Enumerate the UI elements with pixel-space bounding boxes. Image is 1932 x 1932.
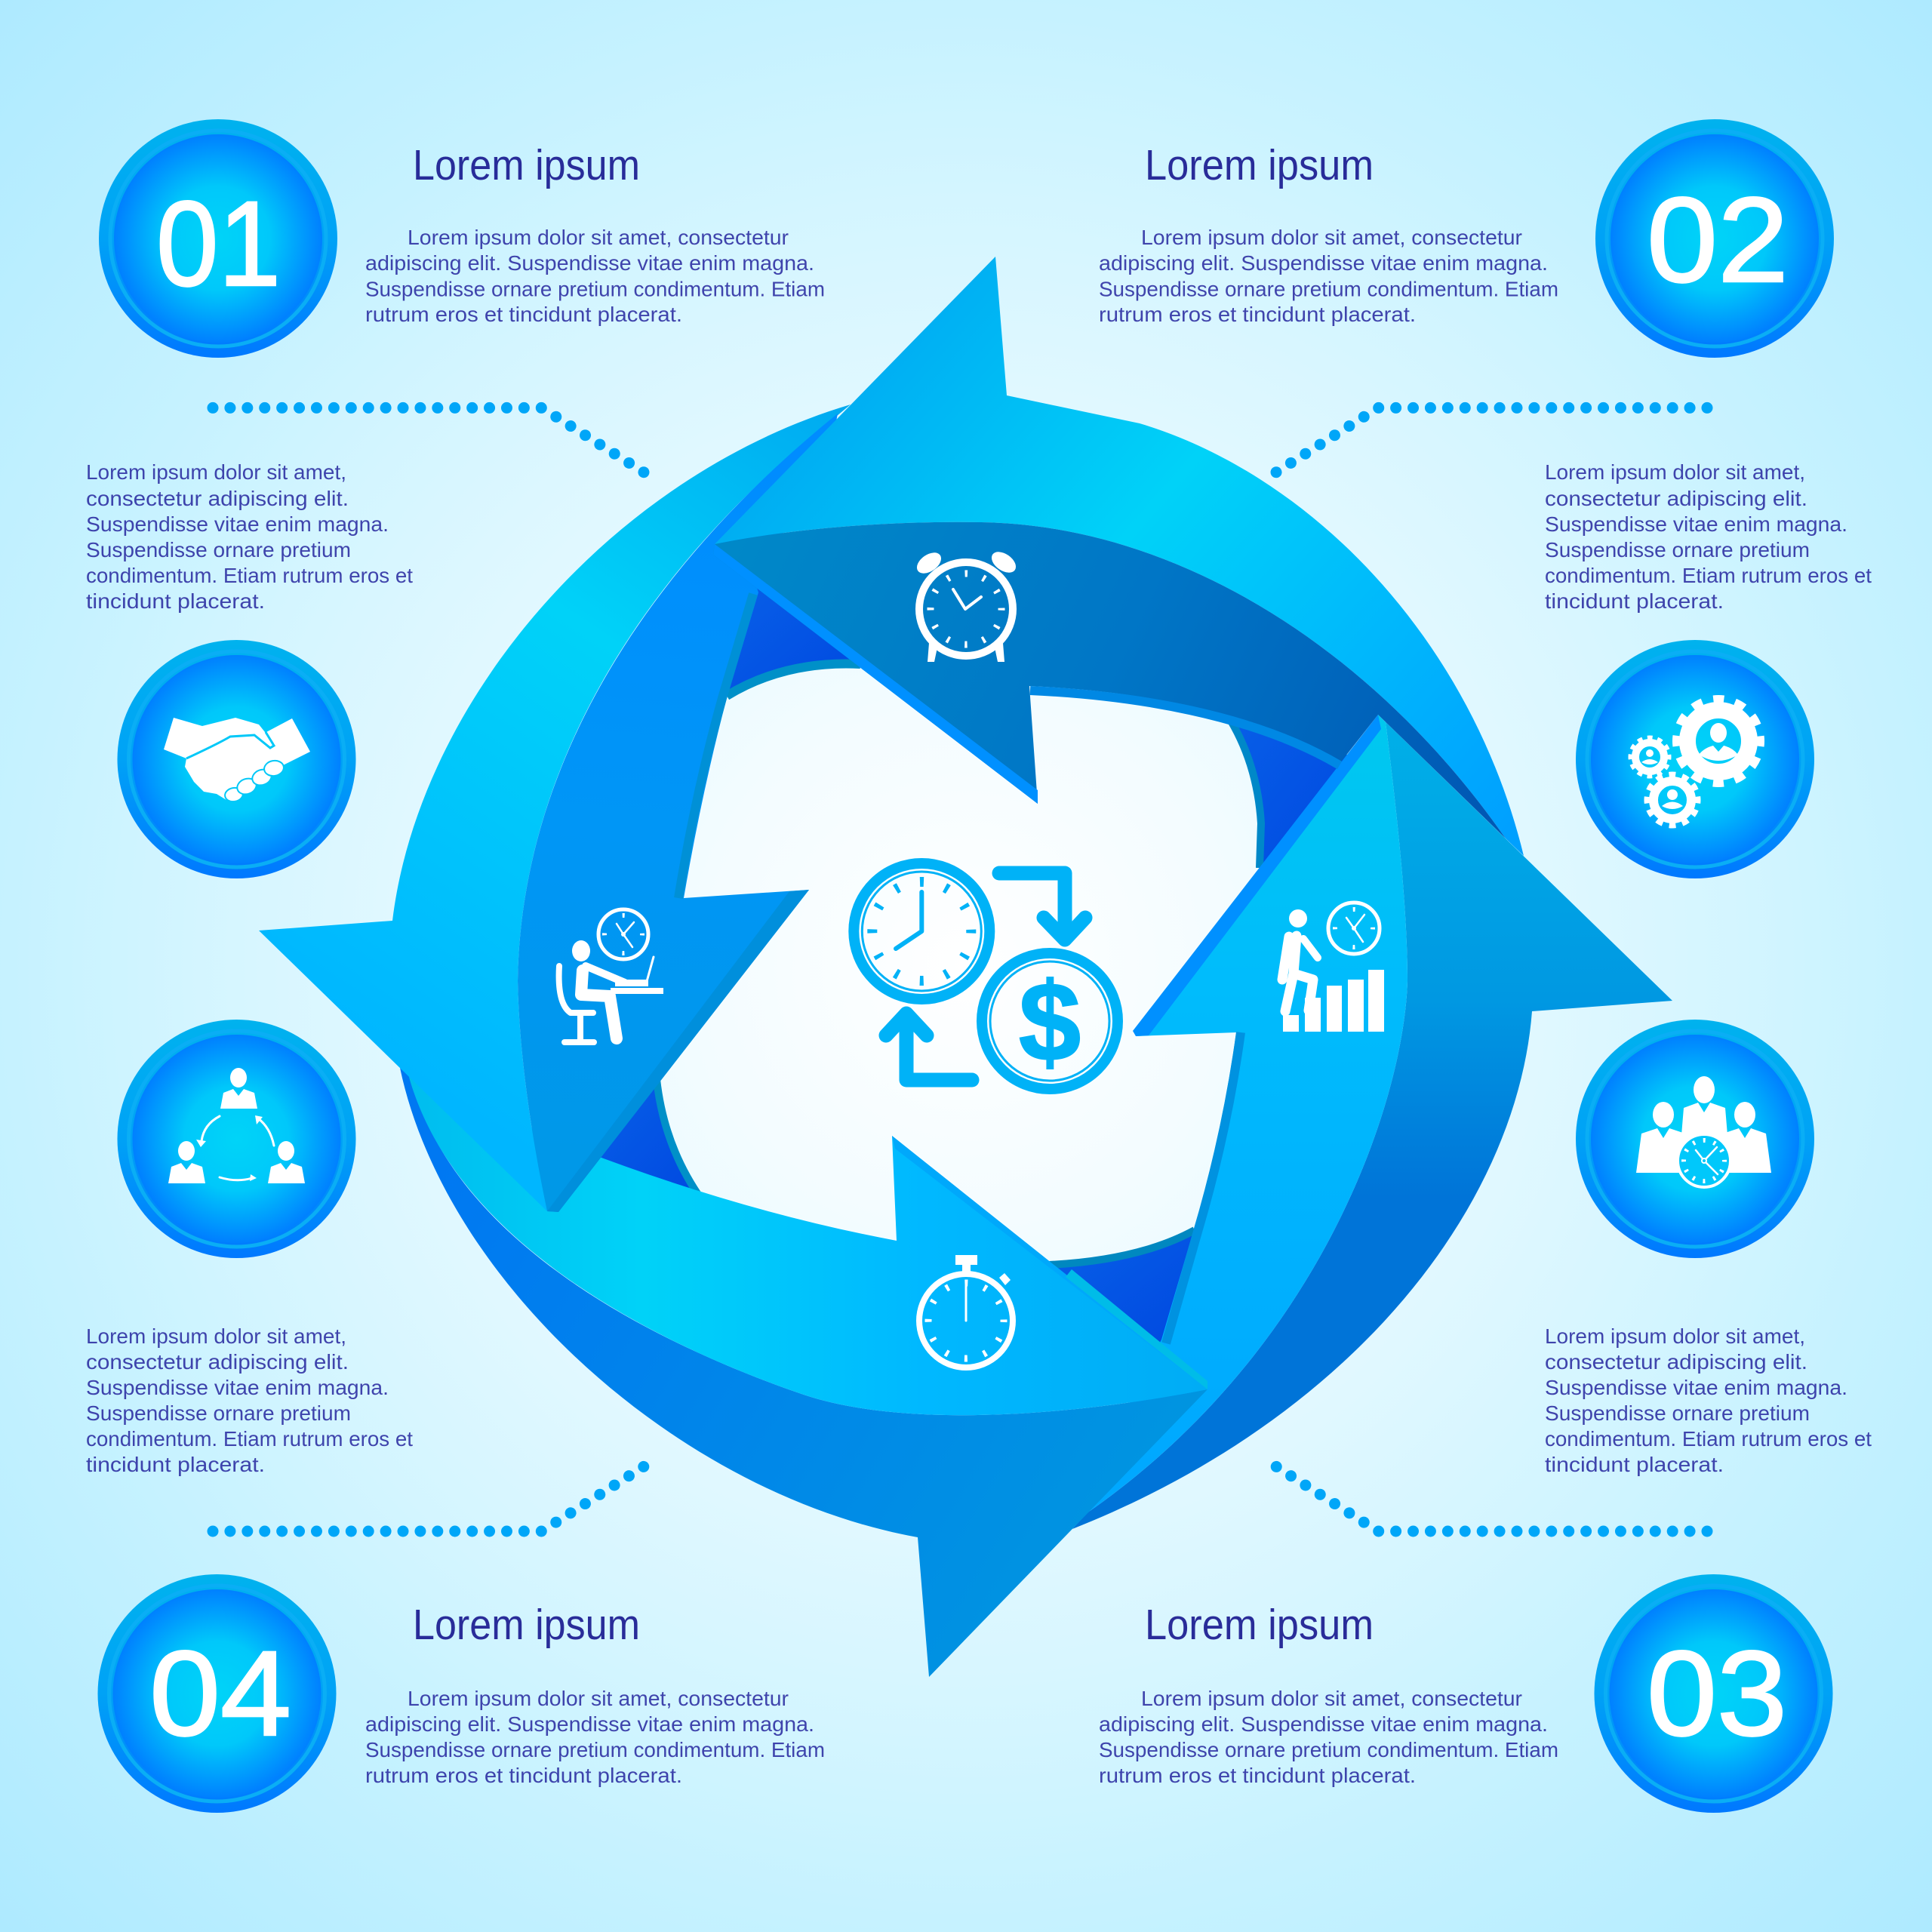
left arrow inner edge stripe [678, 594, 753, 898]
heading: section 3: Lorem ipsum [1145, 1601, 1374, 1649]
text block: upper left side: tincidunt placerat. [86, 589, 265, 613]
text block: upper left side [86, 460, 413, 613]
text block: lower left side: Suspendisse vitae enim magna. [86, 1376, 389, 1399]
clock [1678, 1134, 1730, 1187]
text block: section 3 [1099, 1687, 1558, 1787]
text block: upper left side: consectetur adipiscing elit. [86, 487, 349, 510]
text block: upper right side [1545, 460, 1872, 613]
number badge 03: 03 [1647, 1626, 1787, 1761]
text block: lower right side: tincidunt placerat. [1545, 1453, 1724, 1476]
dollar coin: $ [1019, 960, 1081, 1084]
heading: section 2: Lorem ipsum [1145, 141, 1374, 189]
arrow to clock [886, 1014, 972, 1080]
text block: upper right side: condimentum. Etiam rutrum eros et [1545, 564, 1872, 587]
right arrow dark outer band and head [1072, 715, 1672, 1529]
dotted connector: top right [1275, 408, 1707, 473]
text block: section 3: adipiscing elit. Suspendisse vitae enim magna. [1099, 1712, 1548, 1736]
shadow patch: top left of ring [727, 585, 860, 696]
text block: lower right side: Suspendisse vitae enim magna. [1545, 1376, 1847, 1399]
icon: handshake [164, 718, 310, 803]
dollar coin [982, 953, 1118, 1089]
text block: lower left side [86, 1324, 413, 1476]
text block: lower left side: Lorem ipsum dolor sit amet, [86, 1324, 346, 1348]
arrow: bottom, pointing right [400, 1068, 1208, 1677]
text block: section 2: rutrum eros et tincidunt placerat. [1099, 303, 1416, 326]
heading: section 1: Lorem ipsum [413, 141, 640, 189]
chair [559, 966, 594, 1042]
text block: section 2: adipiscing elit. Suspendisse vitae enim magna. [1099, 251, 1548, 275]
dotted connector: bottom left [213, 1466, 645, 1531]
shadow patch: top right of ring [1223, 709, 1347, 875]
icon: climbing person with clock and bars [1282, 903, 1384, 1032]
walking person [1282, 909, 1318, 1011]
text block: section 3: Lorem ipsum dolor sit amet, consectetur [1141, 1687, 1522, 1710]
left arrow light band and head [259, 405, 851, 1211]
text block: lower right side [1545, 1324, 1872, 1476]
text block: upper right side: consectetur adipiscing elit. [1545, 487, 1807, 510]
text block: section 2 [1099, 226, 1558, 326]
badge: handshake [118, 640, 356, 878]
text block: lower left side: Suspendisse ornare pretium [86, 1401, 351, 1425]
text block: section 3: rutrum eros et tincidunt placerat. [1099, 1764, 1416, 1787]
seated person [572, 940, 625, 1038]
text block: lower right side: consectetur adipiscing elit. [1545, 1350, 1807, 1374]
shadow patch: bottom right of ring [1049, 1230, 1196, 1347]
text block: section 3: Suspendisse ornare pretium condimentum. Etiam [1099, 1738, 1558, 1761]
text block: section 1: rutrum eros et tincidunt placerat. [365, 303, 682, 326]
bottom arrow bright band and head [408, 1072, 1208, 1415]
text block: section 1: adipiscing elit. Suspendisse vitae enim magna. [365, 251, 814, 275]
dotted connector: top left [213, 408, 645, 473]
number badge 04: 04 [149, 1626, 291, 1761]
desk and laptop [611, 980, 663, 994]
clock [598, 909, 648, 959]
text block: section 1: Lorem ipsum dolor sit amet, consectetur [408, 226, 789, 249]
text block: upper right side: Lorem ipsum dolor sit amet, [1545, 460, 1805, 484]
top arrow head edge stripe [713, 544, 1038, 804]
text block: section 4 [365, 1687, 825, 1787]
arrow: left, pointing down [259, 405, 851, 1212]
right arrow inner edge stripe [1166, 1032, 1241, 1343]
shadow patch: bottom left of ring [589, 1079, 703, 1201]
icon: three people and clock [1636, 1076, 1771, 1187]
text block: section 2: Lorem ipsum dolor sit amet, consectetur [1141, 226, 1522, 249]
dotted connector: bottom right [1275, 1466, 1707, 1531]
number badge 01: 01 [156, 176, 281, 311]
text block: lower right side: condimentum. Etiam rutrum eros et [1545, 1427, 1872, 1451]
text block: lower right side: Lorem ipsum dolor sit amet, [1545, 1324, 1805, 1348]
text block: upper right side: Suspendisse vitae enim magna. [1545, 512, 1847, 536]
text block: lower left side: condimentum. Etiam rutrum eros et [86, 1427, 413, 1451]
icon: stopwatch [919, 1255, 1013, 1367]
text block: upper left side: Suspendisse ornare pretium [86, 538, 351, 561]
clock [854, 863, 989, 999]
small gear [1630, 738, 1669, 776]
number badge 02 [1595, 119, 1834, 358]
text block: section 1: Suspendisse ornare pretium condimentum. Etiam [365, 278, 825, 300]
text block: section 4: Suspendisse ornare pretium condimentum. Etiam [365, 1738, 825, 1761]
icon: three people with arrows [168, 1068, 305, 1183]
number badge 04 [98, 1574, 337, 1813]
text block: section 4: Lorem ipsum dolor sit amet, consectetur [408, 1687, 789, 1710]
number badge 01 [99, 119, 337, 358]
text block: section 1 [365, 226, 825, 326]
number badge 02: 02 [1647, 172, 1789, 307]
bars [1283, 970, 1384, 1032]
text block: lower left side: tincidunt placerat. [86, 1453, 265, 1476]
text block: lower left side: consectetur adipiscing elit. [86, 1350, 349, 1374]
top arrow dark face and band [713, 522, 1506, 838]
text block: section 2: Suspendisse ornare pretium condimentum. Etiam [1099, 278, 1558, 300]
left arrow head edge stripe [547, 890, 809, 1212]
text block: upper right side: tincidunt placerat. [1545, 589, 1724, 613]
text block: section 4: rutrum eros et tincidunt placerat. [365, 1764, 682, 1787]
arrow: top, pointing left [713, 257, 1524, 856]
top arrow inner edge stripe [1030, 691, 1340, 765]
text block: lower right side: Suspendisse ornare pretium [1545, 1401, 1810, 1425]
icon: gears [1630, 700, 1760, 826]
badge: gears with people [1576, 640, 1814, 878]
text block: upper right side: Suspendisse ornare pretium [1545, 538, 1810, 561]
number badge 03 [1594, 1574, 1832, 1813]
top arrow light outer band and head [715, 257, 1524, 856]
text block: upper left side: Suspendisse vitae enim magna. [86, 512, 389, 536]
badge: team with clock [1576, 1020, 1814, 1258]
clock [1328, 903, 1380, 954]
large gear [1677, 700, 1760, 783]
heading: section 4: Lorem ipsum [413, 1601, 640, 1649]
arrow to coin [999, 873, 1085, 940]
text block: upper left side: condimentum. Etiam rutrum eros et [86, 564, 413, 587]
left arrow darker inner band and head [518, 414, 838, 1212]
right arrow light band and head [1087, 715, 1407, 1513]
right arrow head edge stripe [1133, 715, 1381, 1036]
bottom arrow head edge stripe [892, 1136, 1208, 1389]
medium gear [1647, 774, 1698, 826]
badge: team cycle [118, 1020, 356, 1258]
central icon: time is money [854, 863, 1118, 1089]
arrow: right, pointing up [1072, 715, 1672, 1529]
icon: alarm clock [913, 548, 1020, 662]
bottom arrow dark outer band and head [400, 1068, 1208, 1677]
text block: upper left side: Lorem ipsum dolor sit amet, [86, 460, 346, 484]
text block: section 4: adipiscing elit. Suspendisse vitae enim magna. [365, 1712, 814, 1736]
icon: person at laptop with clock [559, 909, 663, 1042]
